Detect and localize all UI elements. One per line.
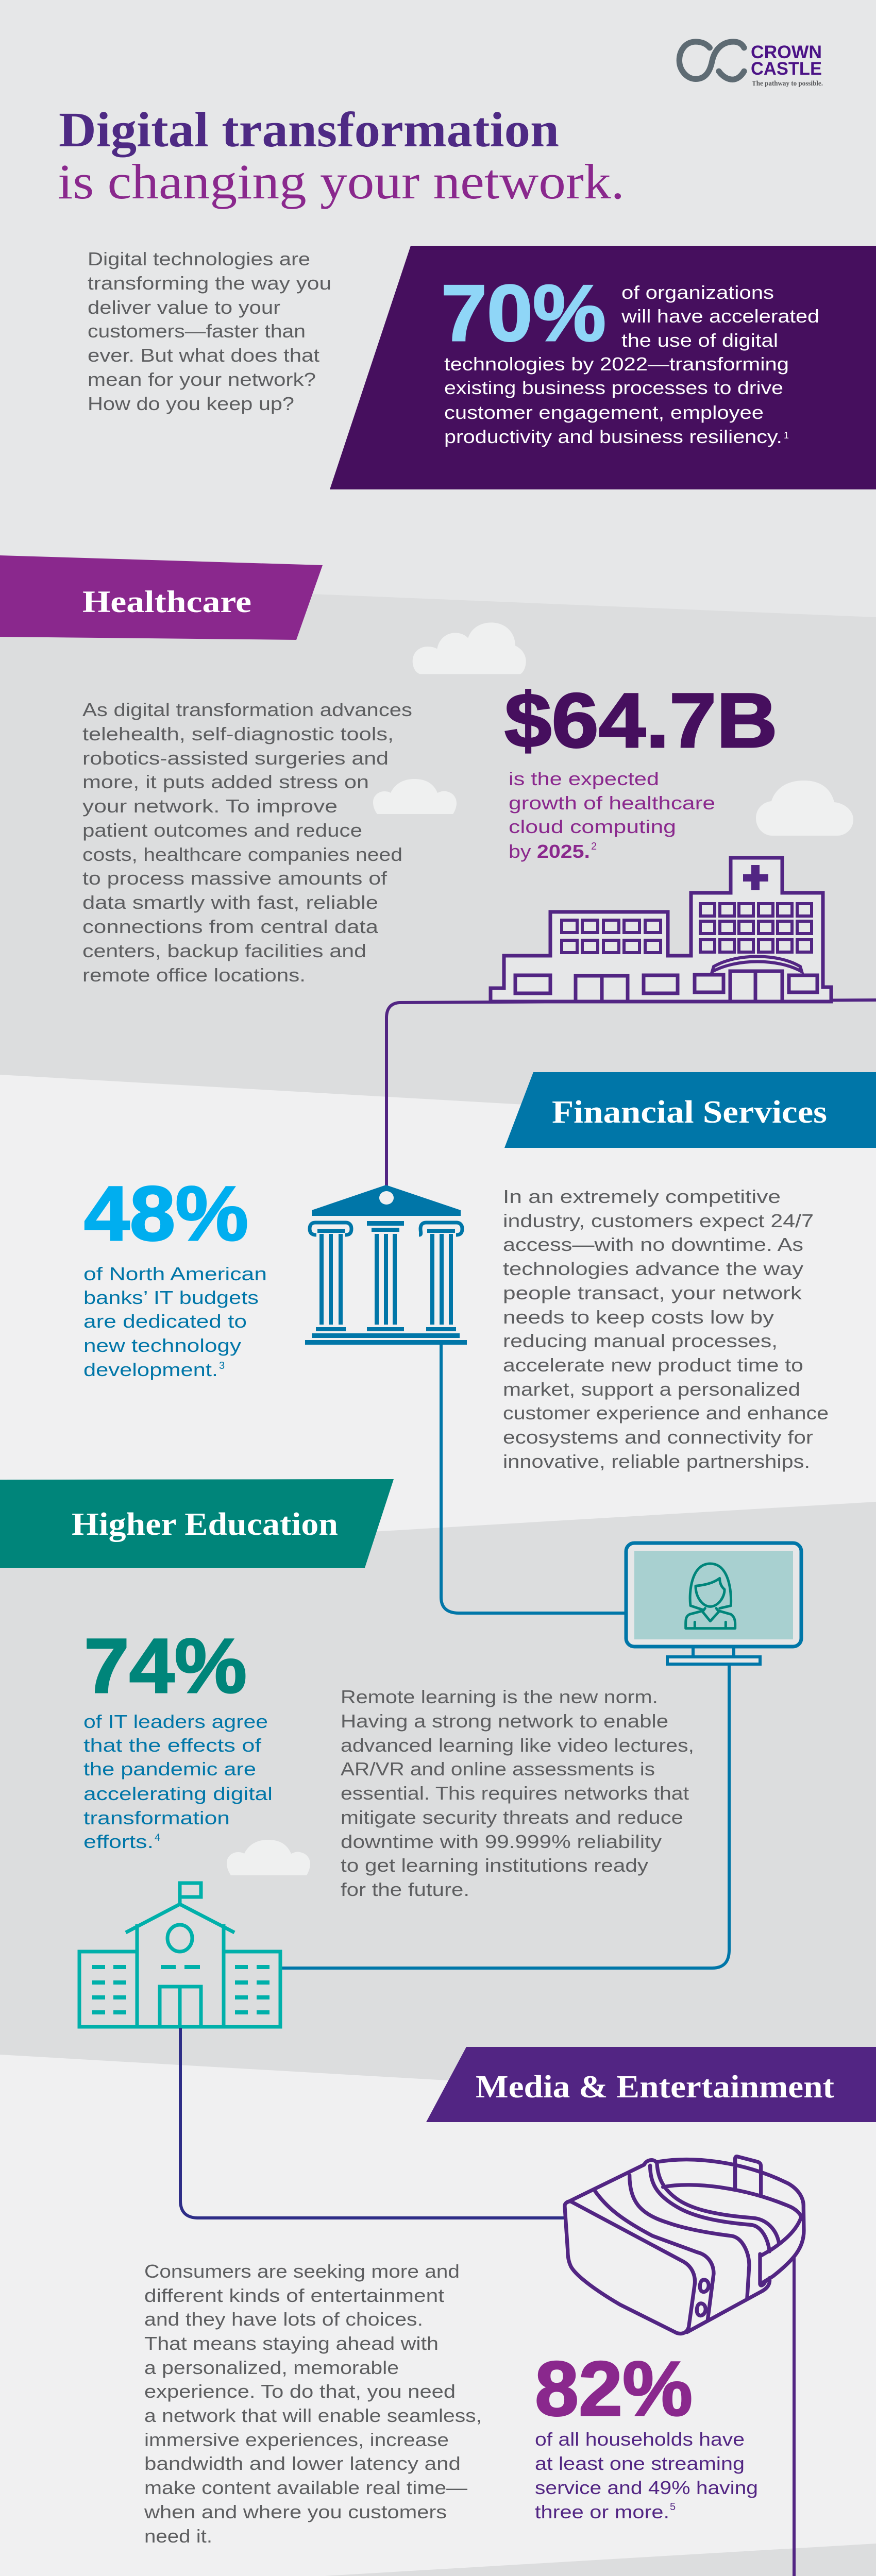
- text block: Financial Services: industry, customers expect 24/7: [503, 1210, 814, 1231]
- connector: school to headset: [180, 2028, 564, 2218]
- connector: monitor to school: [281, 1665, 729, 1968]
- stat: $64.7B: cloud computing: [509, 816, 676, 837]
- stat: $64.7B: growth of healthcare: [509, 792, 715, 814]
- stat: 48%: banks’ IT budgets: [83, 1287, 259, 1308]
- text block: Healthcare: remote office locations.: [82, 964, 306, 986]
- intro text block: Digital technologies are: [88, 248, 310, 269]
- stat: 74%: the pandemic are: [83, 1758, 256, 1780]
- connector: hospital to bank: [386, 1000, 876, 1186]
- banner: Healthcare: [0, 555, 323, 640]
- title: is changing your network.: [58, 154, 625, 209]
- stat: $64.7B: is the expected: [509, 768, 659, 789]
- stat: 48%: new technology: [83, 1335, 241, 1356]
- stat: 48%: of North American: [83, 1263, 267, 1284]
- text block: Media & Entertainment: immersive experiences, increase: [144, 2429, 449, 2450]
- stat: $64.7B: [504, 677, 778, 862]
- text block: Healthcare: connections from central data: [82, 916, 379, 937]
- icon: bank: [305, 1185, 467, 1345]
- text block: Higher Education: for the future.: [341, 1879, 469, 1900]
- text block: Healthcare: data smartly with fast, reliable: [82, 892, 378, 913]
- stat: 74%: efforts.: [83, 1831, 154, 1852]
- text block: Financial Services: innovative, reliable partnerships.: [503, 1451, 810, 1472]
- stat description: will have accelerated: [621, 306, 819, 327]
- stat description: customer engagement, employee: [444, 402, 764, 423]
- text block: Higher Education: essential. This requires networks that: [341, 1783, 689, 1804]
- intro text block: deliver value to your: [88, 297, 280, 318]
- stat: 82%: service and 49% having: [535, 2477, 758, 2498]
- text block: Media & Entertainment: a network that will enable seamless,: [144, 2405, 482, 2426]
- stat: 74%: that the effects of: [83, 1735, 262, 1756]
- stat: 82%: of all households have: [535, 2429, 745, 2450]
- stat: 48%: development.: [83, 1359, 218, 1380]
- stat: $64.7B: 2: [591, 841, 597, 852]
- connector: headset to call to action: [582, 2257, 794, 2576]
- stat: $64.7B: $64.7B: [504, 677, 778, 764]
- icon: cloud 3: [756, 781, 853, 836]
- stat description: productivity and business resiliency.: [444, 426, 782, 447]
- icon: medical cross: [743, 865, 768, 890]
- text block: Higher Education: advanced learning like video lectures,: [341, 1735, 694, 1756]
- stat: 82%: [535, 2345, 758, 2522]
- stat: 82%: 5: [670, 2501, 676, 2513]
- intro text block: How do you keep up?: [88, 393, 294, 414]
- banner: Financial Services: [504, 1072, 876, 1148]
- icon: VR headset: [565, 2157, 804, 2334]
- text block: Media & Entertainment: experience. To do that, you need: [144, 2381, 456, 2402]
- text block: Media & Entertainment: when and where you customers: [144, 2501, 447, 2522]
- title: [58, 102, 625, 209]
- title: Digital transformation: [59, 102, 559, 157]
- stat: 74%: [83, 1622, 273, 1852]
- stat: 82%: 82%: [535, 2345, 693, 2432]
- logo: Crown Castle header: CASTLE: [751, 59, 822, 79]
- intro text block: mean for your network?: [88, 369, 316, 390]
- text block: Healthcare: patient outcomes and reduce: [82, 820, 362, 841]
- text block: Healthcare: telehealth, self-diagnostic tools,: [82, 723, 394, 744]
- icon: monitor with student: [626, 1543, 801, 1664]
- stat description: [444, 282, 819, 447]
- stat description: existing business processes to drive: [444, 377, 783, 398]
- text block: Media & Entertainment: and they have lots of choices.: [144, 2309, 423, 2330]
- text block: Financial Services: needs to keep costs low by: [503, 1307, 774, 1328]
- text block: Healthcare: [82, 699, 412, 986]
- stat description: 1: [784, 430, 789, 440]
- text block: Media & Entertainment: Consumers are seeking more and: [144, 2261, 460, 2282]
- stat description: the use of digital: [621, 330, 778, 351]
- banner: Higher Education: [0, 1479, 394, 1568]
- intro text block: [88, 248, 331, 414]
- text block: Financial Services: In an extremely competitive: [503, 1186, 781, 1207]
- stat: 48%: [83, 1170, 267, 1380]
- banner: Healthcare: Healthcare: [82, 585, 251, 619]
- text block: Financial Services: customer experience and enhance: [503, 1402, 829, 1423]
- text block: Healthcare: to process massive amounts of: [82, 868, 388, 889]
- text block: Financial Services: ecosystems and connectivity for: [503, 1427, 813, 1448]
- icon: school: [79, 1883, 280, 2027]
- text block: Media & Entertainment: need it.: [144, 2526, 212, 2547]
- text block: Higher Education: to get learning institutions ready: [341, 1855, 648, 1876]
- banner: Financial Services: Financial Services: [552, 1095, 827, 1130]
- text block: Financial Services: [503, 1186, 829, 1472]
- text block: Higher Education: Remote learning is the new norm.: [341, 1686, 658, 1707]
- stat: 74%: 4: [155, 1832, 160, 1843]
- text block: Higher Education: downtime with 99.999% reliability: [341, 1831, 662, 1852]
- text block: Healthcare: robotics-assisted surgeries and: [82, 748, 389, 769]
- logo: Crown Castle header: [679, 42, 823, 88]
- stat: $64.7B: by 2025.: [509, 841, 590, 862]
- text block: Financial Services: reducing manual processes,: [503, 1330, 778, 1351]
- text block: Media & Entertainment: a personalized, memorable: [144, 2357, 399, 2378]
- text block: Higher Education: mitigate security threats and reduce: [341, 1807, 683, 1828]
- text block: Healthcare: costs, healthcare companies need: [82, 844, 402, 865]
- text block: Media & Entertainment: bandwidth and lower latency and: [144, 2453, 461, 2474]
- stat: 82%: at least one streaming: [535, 2453, 745, 2474]
- banner: Higher Education: Higher Education: [72, 1507, 338, 1542]
- text block: Financial Services: accelerate new product time to: [503, 1354, 803, 1376]
- icon: student: [686, 1564, 735, 1629]
- logo: Crown Castle header: The pathway to possible.: [752, 80, 823, 88]
- stat: 74%: transformation: [83, 1807, 230, 1828]
- stat: 48%: are dedicated to: [83, 1311, 247, 1332]
- text block: Higher Education: [341, 1686, 694, 1900]
- text block: Healthcare: centers, backup facilities and: [82, 940, 366, 961]
- text block: Higher Education: AR/VR and online assessments is: [341, 1758, 655, 1780]
- text block: Media & Entertainment: [144, 2261, 482, 2547]
- intro text block: customers—faster than: [88, 320, 306, 342]
- banner: Media & Entertainment: Media & Entertainment: [476, 2070, 834, 2105]
- text block: Healthcare: more, it puts added stress on: [82, 771, 369, 792]
- text block: Healthcare: your network. To improve: [82, 795, 338, 817]
- stat: 74%: accelerating digital: [83, 1783, 273, 1804]
- banner: Media & Entertainment: [426, 2047, 876, 2122]
- text block: Media & Entertainment: make content available real time—: [144, 2477, 467, 2498]
- text block: Higher Education: Having a strong network to enable: [341, 1710, 668, 1732]
- icon: cloud 2: [373, 779, 457, 814]
- stat: 74%: of IT leaders agree: [83, 1711, 268, 1732]
- text block: Financial Services: market, support a personalized: [503, 1379, 800, 1400]
- text block: Media & Entertainment: different kinds of entertainment: [144, 2285, 444, 2306]
- icon: cloud 1: [413, 622, 526, 674]
- stat: 48%: 3: [219, 1360, 225, 1371]
- intro text block: ever. But what does that: [88, 345, 319, 366]
- logo: Crown Castle header: CROWN: [751, 42, 822, 62]
- intro text block: transforming the way you: [88, 273, 331, 294]
- stat number: 70%: 70%: [441, 268, 606, 358]
- icon: hospital: [491, 858, 831, 1002]
- text block: Media & Entertainment: That means staying ahead with: [144, 2333, 439, 2354]
- connector: bank to monitor: [441, 1344, 626, 1613]
- stat: 74%: 74%: [84, 1622, 247, 1709]
- icon: cloud 4: [227, 1840, 310, 1875]
- text block: Financial Services: people transact, your network: [503, 1282, 802, 1303]
- panel: 70% stat: [330, 246, 876, 489]
- text block: Financial Services: access—with no downtime. As: [503, 1234, 803, 1255]
- stat: 48%: 48%: [84, 1170, 248, 1257]
- text block: Financial Services: technologies advance the way: [503, 1258, 803, 1279]
- text block: Healthcare: As digital transformation advances: [82, 699, 412, 720]
- stat description: technologies by 2022—transforming: [444, 353, 789, 375]
- stat: 82%: three or more.: [535, 2501, 669, 2522]
- stat description: of organizations: [621, 282, 774, 303]
